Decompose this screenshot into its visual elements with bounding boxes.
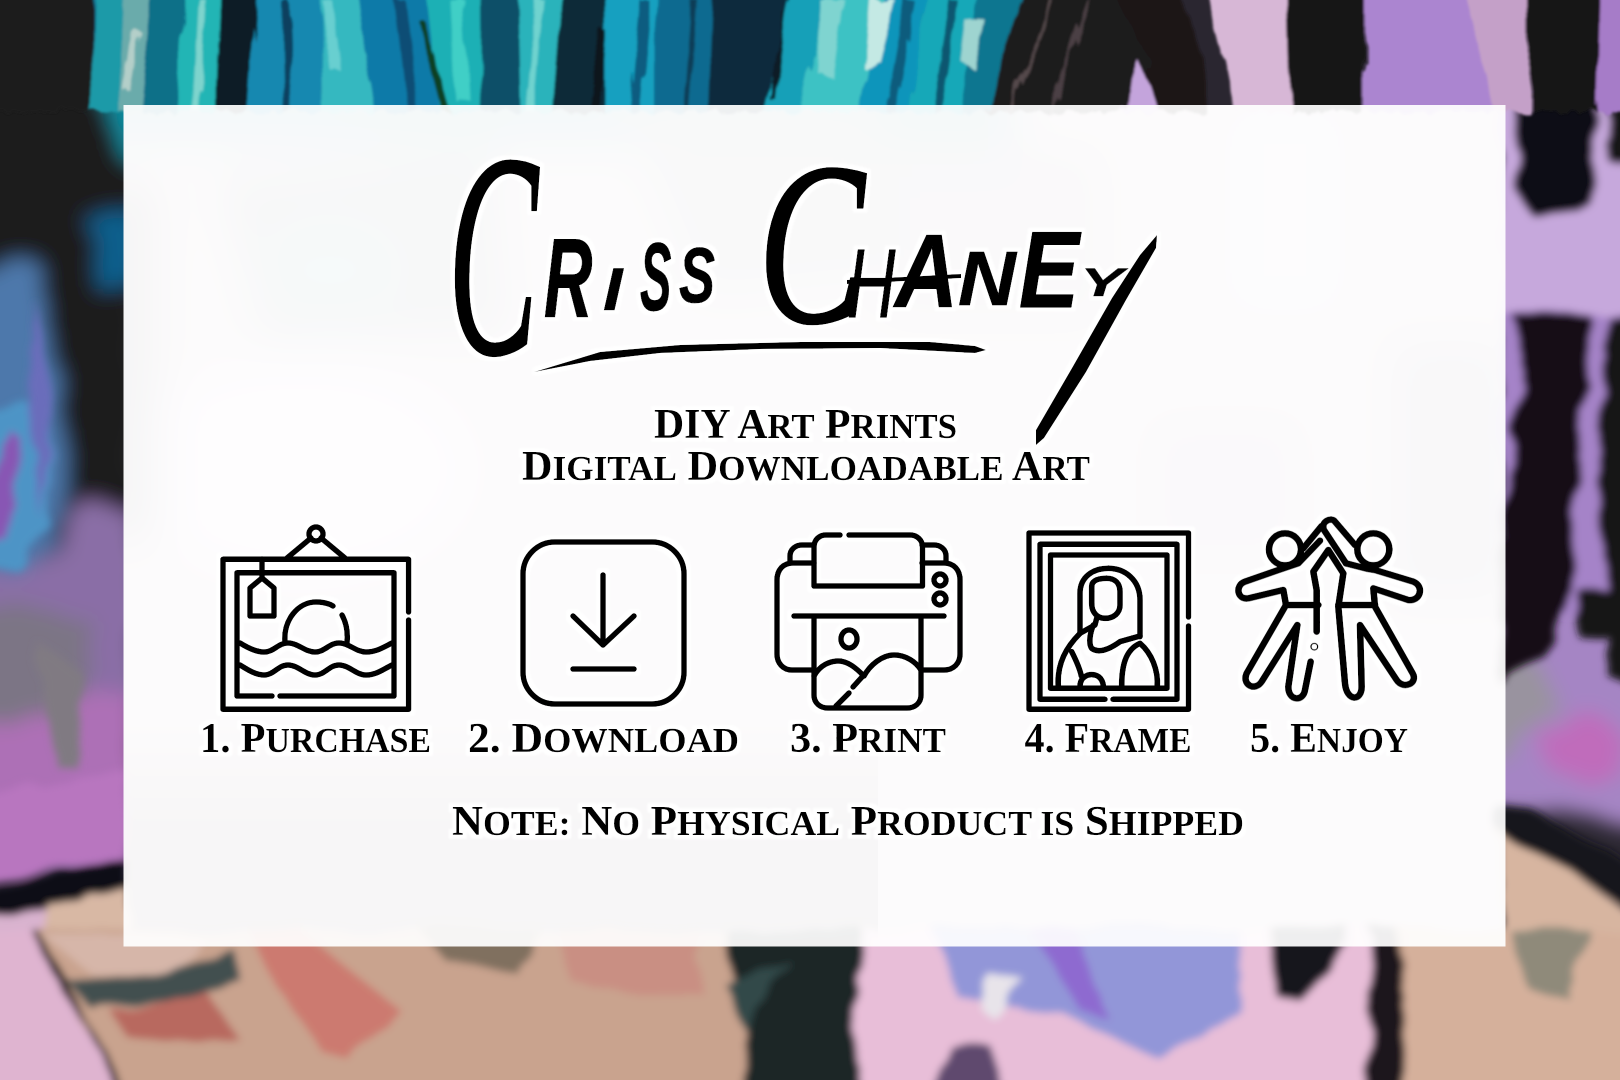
ghost of the portrait behind the panel <box>124 105 1502 931</box>
signature logo: Criss Chaney: N <box>958 235 1018 322</box>
panel content <box>200 94 1420 845</box>
bottom strip <box>0 930 1620 1080</box>
note: no physical product: NOTE: NO PHYSICAL PRODUCT IS SHIPPED <box>452 799 1244 845</box>
signature logo: Criss Chaney: A <box>893 214 958 330</box>
top strip: hair and dark stripes <box>0 0 1620 112</box>
heading lines: DIY ART PRINTS <box>654 402 957 448</box>
right column <box>1500 90 1620 320</box>
signature logo: Criss Chaney: I <box>603 256 624 323</box>
label: 1. Purchase: 1. PURCHASE <box>200 716 431 762</box>
heading lines <box>522 402 1090 490</box>
signature logo: Criss Chaney: R <box>544 215 592 341</box>
signature logo: Criss Chaney: S <box>640 223 671 332</box>
heading lines: DIGITAL DOWNLOADABLE ART <box>522 444 1090 490</box>
label: 2. Download: 2. DOWNLOAD <box>468 716 739 762</box>
signature logo: Criss Chaney: E <box>1019 210 1082 331</box>
signature logo: Criss Chaney: Y <box>1080 260 1129 305</box>
signature logo: Criss Chaney: C <box>758 116 866 373</box>
icon: framed portrait <box>1029 533 1188 709</box>
signature logo: Criss Chaney: C <box>448 94 539 416</box>
icon: framed picture with price tag <box>223 527 409 709</box>
icon: download <box>523 542 684 704</box>
icon: printer <box>777 535 960 708</box>
icon: two people high-five <box>1238 520 1420 698</box>
translucent white panel <box>124 105 1506 946</box>
label: 3. Print: 3. PRINT <box>790 716 946 762</box>
label: 4. Frame: 4. FRAME <box>1024 716 1192 762</box>
signature flourish: tail and underline <box>534 235 1157 445</box>
signature logo: Criss Chaney: S <box>679 232 715 319</box>
signature logo: Criss Chaney: H <box>847 230 896 338</box>
signature logo: Criss Chaney <box>448 94 1157 445</box>
label: 5. Enjoy: 5. ENJOY <box>1250 716 1408 762</box>
